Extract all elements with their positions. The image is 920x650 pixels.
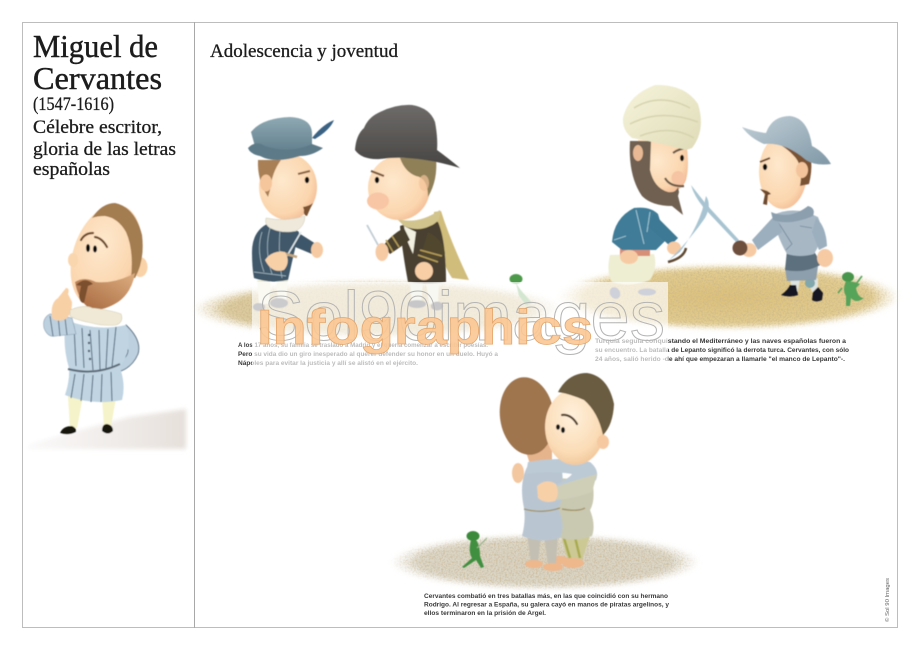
dates and description: gloria de las letras — [33, 139, 176, 160]
tunic — [612, 208, 666, 250]
hand — [52, 288, 72, 321]
character: Cervantes portrait — [26, 195, 186, 449]
name heading — [33, 28, 162, 96]
shoes — [408, 300, 426, 308]
scene 1: caption: Nápoles para evitar la justicia y allí se alistó en el ejército. — [238, 360, 418, 367]
scene 3: ground — [390, 534, 700, 590]
feather — [312, 120, 334, 139]
nose — [367, 192, 389, 210]
legs — [68, 396, 116, 428]
turban — [623, 85, 701, 150]
scimitar — [668, 196, 709, 261]
eyes and brows — [86, 244, 90, 252]
ruff — [771, 206, 814, 222]
legs — [410, 282, 439, 304]
hair — [400, 158, 436, 197]
character: young Cervantes with dagger — [248, 117, 334, 311]
beard — [75, 273, 135, 310]
raised arm — [44, 314, 76, 336]
shirt and scarf — [404, 226, 416, 254]
head — [58, 195, 154, 317]
head — [759, 135, 807, 209]
dagger — [287, 232, 301, 256]
ruff collar — [266, 216, 305, 232]
jacket — [400, 221, 446, 284]
shoes — [608, 285, 622, 301]
eye and brow — [680, 155, 684, 161]
front brother face — [556, 424, 560, 430]
legs — [790, 278, 818, 292]
sash — [620, 248, 650, 256]
lizard: scene 3 — [462, 531, 487, 568]
shorts and skirt — [785, 266, 818, 281]
jacket — [252, 223, 299, 282]
akimbo arm — [116, 325, 139, 372]
front brother legs — [560, 530, 592, 562]
scene 2: caption — [595, 338, 849, 363]
dates and description: Célebre escritor, — [33, 117, 162, 138]
hat — [251, 117, 312, 153]
watermark: Infographics: Infographics — [257, 301, 593, 355]
dates and description — [33, 94, 176, 180]
shoes — [253, 303, 265, 311]
sword arm — [752, 214, 782, 250]
face features — [763, 164, 767, 170]
head — [636, 140, 688, 192]
hair and ear — [258, 160, 281, 197]
scene 3: caption: ellos terminaron en la prisión de Argel. — [424, 610, 546, 617]
boots — [781, 285, 823, 302]
face features — [375, 177, 379, 183]
hand — [265, 252, 288, 271]
back brother feet — [525, 560, 543, 568]
nose and moustache — [672, 171, 684, 185]
scene 2: caption: Turquía seguía conquistando el Mediterráneo y las naves españolas fueron a — [595, 338, 847, 345]
back brother tunic — [522, 462, 563, 541]
front brother hair — [558, 373, 614, 435]
cape — [434, 211, 469, 280]
lizard: scene 1 — [510, 274, 532, 305]
lizard: scene 2 — [838, 272, 864, 306]
scene 1: caption: Pero su vida dio un giro inesperado al querer defender su honor en un duelo. Huyó a — [238, 351, 499, 358]
floor shadow — [26, 409, 186, 449]
watermark: white wash box — [252, 282, 668, 368]
scene 3: caption — [424, 593, 670, 617]
striped doublet — [65, 320, 129, 402]
back brother head — [495, 374, 559, 458]
front brother feet — [562, 558, 584, 568]
dates and description: españolas — [33, 159, 110, 180]
watermark: Sol90images outline: Sol90images — [257, 277, 665, 355]
section heading: Adolescencia y joventud — [210, 41, 398, 62]
moustache and goatee — [76, 280, 93, 303]
back brother legs — [527, 535, 558, 564]
hat — [355, 105, 460, 168]
scene 2: ground — [556, 264, 900, 330]
hair — [766, 133, 811, 186]
scene 1: ground — [192, 280, 564, 338]
hands — [742, 243, 756, 257]
character: duelling opponent in black hat — [355, 105, 469, 311]
character: Spanish soldier with helmet — [691, 116, 833, 302]
front brother ear — [597, 435, 609, 449]
scene 3: caption: Rodrigo. Al regresar a España, su galera cayó en manos de piratas argelinos, y — [424, 602, 670, 608]
panel: biography title — [33, 28, 176, 180]
hair and beard — [630, 141, 683, 215]
head — [259, 154, 317, 220]
hands — [620, 250, 638, 264]
front brother hand — [537, 481, 558, 502]
back brother neck — [522, 430, 552, 464]
scene 2: caption: 24 años, salió herido -de ahí que empezaran a llamarle "el manco de Lepanto"-. — [595, 356, 845, 363]
shoes — [60, 424, 113, 434]
sword — [691, 185, 739, 243]
image credit: © Sol 90 Images — [884, 578, 891, 622]
nose — [68, 253, 78, 267]
face features — [305, 177, 309, 183]
front brother head — [545, 389, 605, 465]
hair — [92, 203, 143, 278]
arm with knife — [383, 228, 410, 254]
scene 2: caption: su encuentro. La batalla de Lepanto significó la derrota turca. Cervantes, con sólo — [595, 347, 849, 354]
scene 1: caption: A los 17 años, su familia se trasladó a Madrid y él quería comenzar a escribir poesías. — [238, 342, 488, 349]
front brother tunic — [556, 478, 594, 540]
head — [368, 156, 430, 220]
torso — [773, 210, 821, 256]
back arm — [288, 230, 316, 254]
character: Ottoman soldier with turban — [608, 85, 709, 301]
ruff collar — [70, 306, 122, 325]
arm over shoulder — [526, 459, 597, 498]
helmet — [742, 116, 831, 164]
column divider — [194, 22, 196, 628]
scene 3: caption: Cervantes combatió en tres batallas más, en las que coincidió con su hermano — [424, 593, 668, 600]
front brother hand behind — [512, 463, 524, 483]
sword arm — [648, 214, 678, 246]
characters: brothers embracing — [495, 373, 614, 571]
scene 1: caption — [238, 342, 499, 367]
near arm and hand — [421, 232, 445, 262]
legs — [257, 280, 288, 304]
name heading: Cervantes — [33, 60, 162, 96]
far arm — [812, 218, 827, 250]
name heading: Miguel de — [33, 28, 158, 64]
trousers — [608, 254, 655, 285]
ear — [132, 257, 148, 277]
front brother arm — [552, 474, 597, 500]
dates and description: (1547-1616) — [33, 94, 114, 115]
